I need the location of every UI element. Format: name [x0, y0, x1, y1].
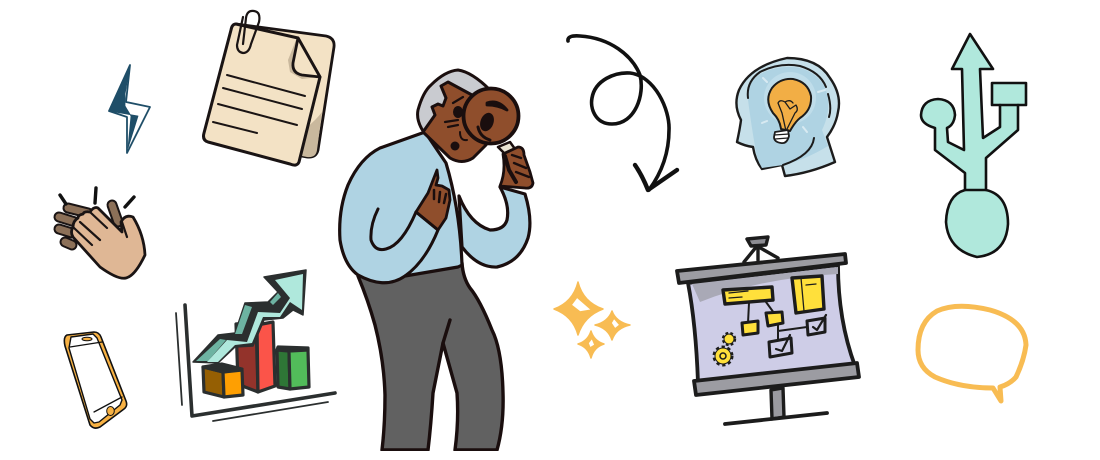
arrow: curly hand-drawn — [568, 36, 677, 190]
sleeve fold line — [371, 209, 416, 250]
trousers — [358, 263, 503, 450]
magnifying lens — [464, 88, 518, 144]
icon: lightning bolt — [109, 65, 150, 153]
icon: sparkles — [554, 282, 630, 358]
bar: red — [236, 322, 275, 392]
chart: rising bars with arrow — [176, 270, 335, 421]
light bulb — [768, 79, 811, 143]
icon: smartphone — [64, 332, 127, 428]
icon: clapping hands — [59, 188, 145, 278]
icon: presentation screen — [677, 237, 859, 424]
icon: document with paperclip — [204, 11, 334, 165]
hair — [418, 70, 490, 135]
shirt torso — [340, 132, 462, 283]
icon: USB symbol — [921, 34, 1026, 257]
icon: head with light bulb — [736, 58, 839, 176]
flowchart content — [723, 276, 826, 357]
bar: orange — [203, 364, 243, 397]
face — [423, 82, 490, 162]
raised arm shirt — [459, 187, 530, 267]
paperclip — [237, 11, 259, 53]
icon: speech bubble — [918, 306, 1026, 401]
chest hand — [416, 170, 450, 230]
figure: man with magnifying glass — [340, 70, 533, 460]
magnifying handle — [498, 142, 515, 154]
gripping hand — [500, 147, 533, 188]
arrow: growth — [193, 270, 306, 363]
bar: green — [277, 347, 309, 389]
gears — [714, 334, 734, 364]
